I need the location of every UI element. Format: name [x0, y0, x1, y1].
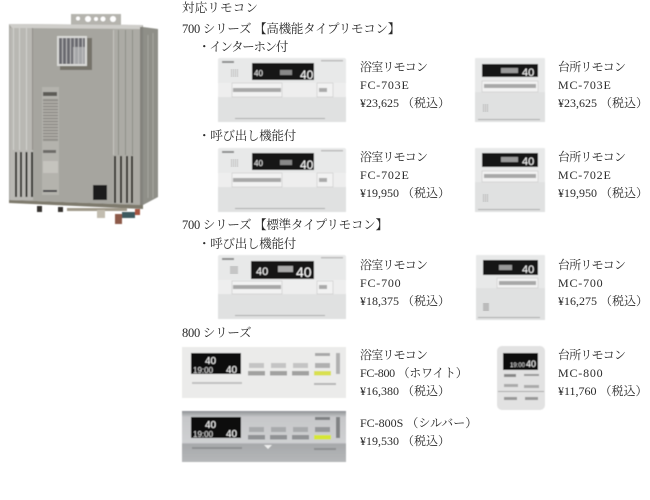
- heading: compatible remotes: 対応リモコン: [182, 1, 258, 15]
- text: FC-700: [360, 258, 450, 308]
- heater mounting bracket: [71, 14, 121, 25]
- remote: FC-800 white: 40: [205, 356, 217, 367]
- text: MC-702E: MC-702E: [558, 168, 612, 182]
- remote: FC-800S silver: 19:00: [193, 430, 214, 439]
- heading: 700 series high function: 700 シリーズ 【高機能タイプリモコン】: [182, 22, 400, 36]
- text: FC-800S: FC-800S （シルバー）: [360, 416, 477, 430]
- subheading: call function: ・呼び出し機能付: [198, 129, 296, 143]
- text: MC-702E: [558, 150, 648, 200]
- text: FC-800: 浴室リモコン: [360, 348, 427, 362]
- remote: MC-800: 40: [526, 359, 536, 369]
- text: MC-703E: MC-703E: [558, 78, 612, 92]
- text: MC-700: ¥16,275 （税込）: [558, 294, 648, 308]
- subheading: call function standard: ・呼び出し機能付: [198, 237, 296, 251]
- remote: FC-800 white: 40: [226, 365, 238, 376]
- remote: FC-800S silver: 40: [226, 429, 238, 440]
- heater vent: [57, 36, 92, 70]
- remote: FC-700: 40: [296, 264, 312, 280]
- text: FC-800S: [360, 416, 477, 448]
- remote: FC-700: 40: [256, 266, 268, 278]
- remote: MC-700: 40: [522, 264, 534, 276]
- text: MC-702E: 台所リモコン: [558, 150, 625, 164]
- remote: FC-800 white: 19:00: [193, 366, 214, 375]
- remote: MC-800: 19:00: [510, 363, 526, 369]
- text: FC-700: ¥18,375 （税込）: [360, 294, 450, 308]
- remote: MC-703E: [475, 58, 545, 122]
- text: MC-800: MC-800: [558, 366, 603, 380]
- remote: MC-700: [476, 255, 545, 320]
- heater side panel: [143, 27, 158, 205]
- text: FC-800S: ¥19,530 （税込）: [360, 434, 450, 448]
- text: MC-800: ¥11,760 （税込）: [558, 384, 648, 398]
- text: FC-800: ¥16,380 （税込）: [360, 384, 450, 398]
- text: FC-702E: FC-702E: [360, 168, 410, 182]
- text: MC-702E: ¥19,950 （税込）: [558, 186, 648, 200]
- heater specification label: [42, 87, 59, 195]
- remote: FC-703E: 40: [300, 68, 314, 82]
- remote: FC-800 white: [182, 347, 346, 398]
- text: FC-702E: 浴室リモコン: [360, 150, 427, 164]
- subheading: intercom: ・インターホン付: [198, 40, 287, 54]
- remote: MC-702E: 40: [522, 156, 534, 168]
- text: FC-700: FC-700: [360, 276, 401, 290]
- text: FC-702E: ¥19,950 （税込）: [360, 186, 450, 200]
- remote: FC-800S silver: [182, 411, 346, 462]
- text: FC-703E: FC-703E: [360, 78, 410, 92]
- text: FC-800: FC-800 （ホワイト）: [360, 366, 467, 380]
- text: MC-703E: ¥23,625 （税込）: [558, 96, 648, 110]
- text: MC-700: [558, 258, 648, 308]
- remote: FC-703E: [218, 58, 346, 122]
- text: MC-700: MC-700: [558, 276, 603, 290]
- heater vent slots: [15, 152, 133, 203]
- remote: FC-700: [218, 255, 346, 319]
- text: MC-700: 台所リモコン: [558, 258, 625, 272]
- remote: MC-702E: [475, 148, 545, 212]
- remote: MC-800: [497, 346, 545, 410]
- text: FC-703E: 浴室リモコン: [360, 60, 427, 74]
- text: FC-703E: [360, 60, 450, 110]
- remote: FC-800S silver: 40: [205, 420, 217, 431]
- text: MC-800: [558, 348, 648, 398]
- heater front panel: [9, 24, 143, 205]
- icon: water heater unit: [9, 14, 158, 224]
- remote: FC-702E: 40: [254, 159, 263, 168]
- remote: FC-702E: 40: [300, 158, 314, 172]
- heater logo badge: [93, 185, 107, 200]
- heater pipes: [9, 200, 143, 224]
- text: FC-800: [360, 348, 467, 398]
- text: MC-800: 台所リモコン: [558, 348, 625, 362]
- heading: 700 series standard: 700 シリーズ 【標準タイプリモコン】: [182, 218, 388, 232]
- remote: FC-702E: [218, 148, 346, 212]
- text: MC-703E: 台所リモコン: [558, 60, 625, 74]
- text: FC-700: 浴室リモコン: [360, 258, 427, 272]
- heading: 800 series: 800 シリーズ: [182, 326, 251, 340]
- text: FC-703E: ¥23,625 （税込）: [360, 96, 450, 110]
- remote: MC-703E: 40: [522, 67, 534, 79]
- remote: FC-703E: 40: [254, 69, 263, 78]
- text: FC-702E: [360, 150, 450, 200]
- text: MC-703E: [558, 60, 648, 110]
